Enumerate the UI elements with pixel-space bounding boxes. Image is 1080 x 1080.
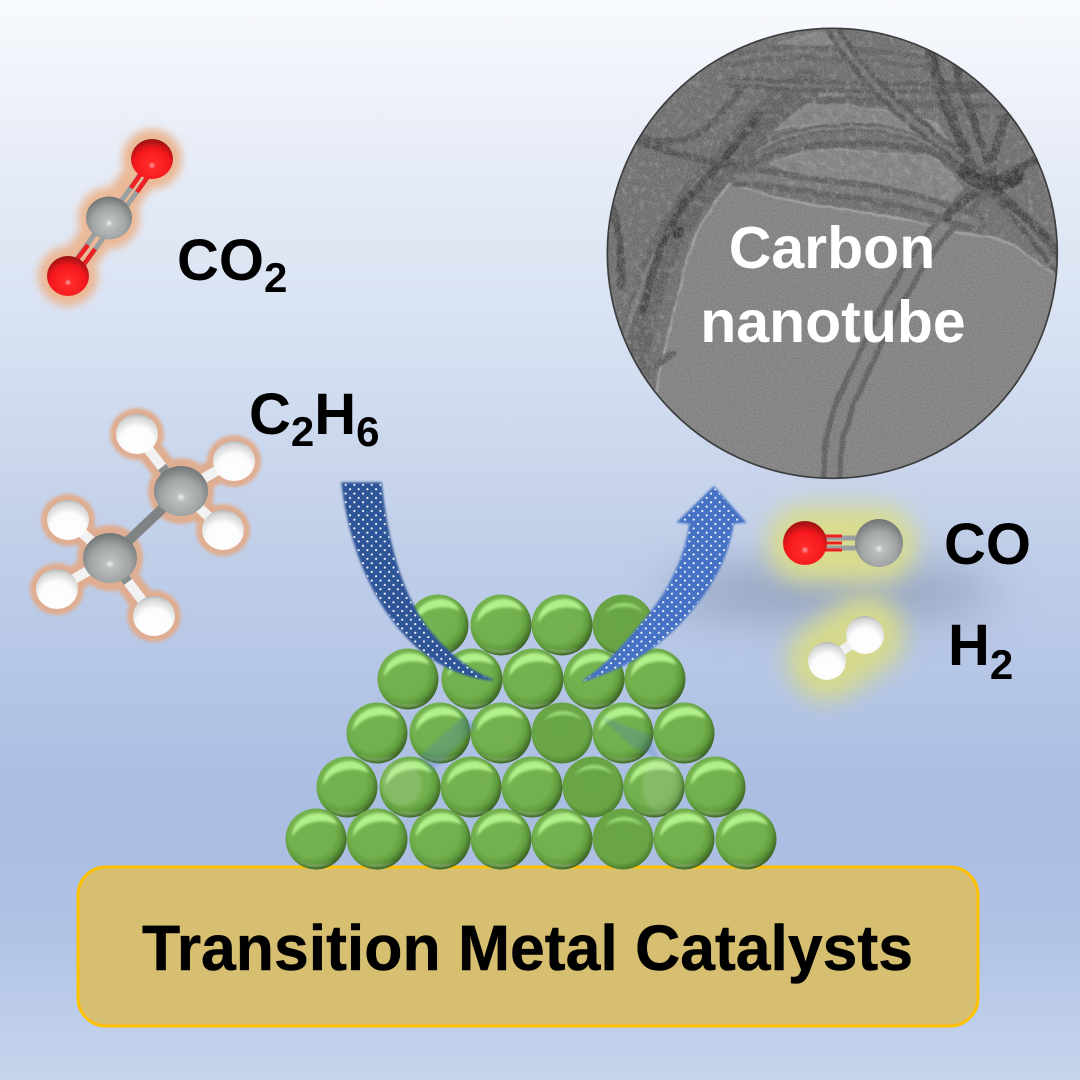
molecule: CO — [768, 506, 916, 582]
arrow: products out of catalyst — [583, 487, 745, 681]
label: C2H6: H — [314, 382, 356, 447]
label: H2: 2 — [990, 641, 1013, 688]
heading: Transition Metal Catalysts: Transition Metal Catalysts — [142, 912, 913, 984]
label: H2: H — [948, 613, 990, 678]
label: Carbon nanotube — [700, 215, 966, 355]
arrow: reactant into catalyst — [342, 483, 493, 680]
label: CO2: 2 — [264, 254, 287, 301]
label: Carbon nanotube: nanotube — [700, 289, 966, 355]
panel: carbon nanotube TEM image — [600, 20, 1070, 490]
film texture over tubes — [609, 30, 1056, 384]
label: C2H6: 6 — [356, 408, 380, 455]
label: CO2: CO — [177, 228, 264, 293]
molecule: H2 — [808, 616, 884, 680]
label: C2H6: C — [249, 382, 291, 447]
shadow behind arrow and products — [660, 566, 1000, 618]
label: CO: CO — [944, 512, 1031, 577]
holes in the film — [656, 182, 1056, 393]
faint arrow tails over lower spheres — [382, 716, 682, 813]
catalyst base panel — [78, 867, 978, 1026]
nanotube walls — [610, 30, 1060, 480]
catalyst sphere pile — [286, 594, 776, 870]
label: C2H6: 2 — [291, 408, 314, 455]
label: Carbon nanotube: Carbon — [729, 215, 935, 281]
molecule: CO2 — [38, 129, 182, 306]
molecule: C2H6 ethane — [30, 408, 261, 642]
